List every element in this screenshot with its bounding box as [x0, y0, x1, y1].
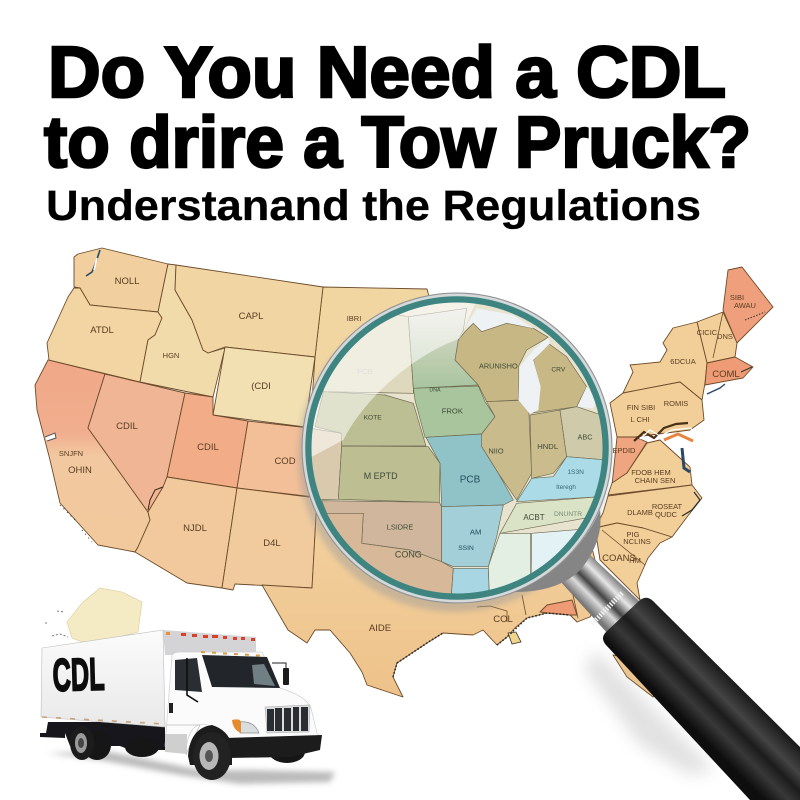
- magnified great lakes: [465, 308, 597, 414]
- state labels: [59, 276, 756, 634]
- Texas and the Gulf coast: [262, 498, 612, 697]
- state labels: COML: [712, 369, 740, 380]
- magnified Ohio: [560, 407, 607, 460]
- windshield reflection: [252, 664, 275, 686]
- Puget Sound and Pacific coast marks: [45, 250, 163, 542]
- magnified Illinois: [482, 400, 532, 500]
- magnified Indiana: [530, 410, 567, 478]
- box lower marker lights: [42, 717, 165, 724]
- Arizona: [135, 477, 237, 588]
- magnified labels: NIIO: [488, 447, 504, 456]
- Gulf state borders: [477, 595, 578, 622]
- state labels: IBRI: [347, 314, 361, 323]
- state labels: FDOB HEM: [631, 468, 671, 477]
- West Virginia: [612, 437, 647, 485]
- New Mexico: [222, 488, 317, 590]
- metal neck: [560, 553, 651, 645]
- windshield: [202, 655, 280, 688]
- grille: [265, 705, 310, 733]
- state labels: CAPL: [239, 311, 263, 322]
- magnified Missouri: [426, 434, 513, 507]
- magnified Nebraska: [315, 392, 426, 446]
- door handle: [169, 703, 173, 713]
- magnified Mississippi: [488, 533, 531, 590]
- rear wheels: [70, 726, 159, 760]
- truck: [40, 630, 335, 784]
- Idaho: [140, 264, 225, 397]
- state labels: HM: [629, 556, 641, 565]
- title: Understanand the Regulations: [46, 182, 701, 230]
- magnified labels: CRV: [551, 367, 566, 374]
- Louisiana coast islands: [508, 632, 521, 644]
- state labels: NOLL: [115, 276, 139, 287]
- neck collar: [515, 510, 601, 592]
- Virginia: [608, 440, 692, 495]
- cab roof lights: [201, 652, 267, 656]
- state labels: SNJFN: [59, 449, 83, 458]
- state labels: CDIL: [197, 442, 219, 453]
- state labels: DLAMB: [627, 508, 653, 517]
- state labels: ROSEAT: [652, 502, 683, 511]
- lens silver rim highlight: [304, 295, 610, 601]
- front wheel: [188, 725, 232, 780]
- state labels: ROMIS: [664, 399, 688, 408]
- state labels: EPDID: [613, 446, 636, 455]
- Gulf coast detail: [393, 613, 570, 677]
- lens and handle shadow: [298, 300, 715, 775]
- roof marker lights: [166, 632, 255, 641]
- Oregon: [47, 288, 162, 382]
- box side logo text: CDL: [52, 648, 105, 701]
- state labels: OHIN: [68, 465, 92, 476]
- state labels: CHAIN SEN: [635, 476, 675, 485]
- door mirror: [187, 658, 198, 702]
- lens rim: [302, 293, 612, 603]
- Alaska inset: [45, 588, 142, 645]
- Vermont and New Hampshire: [697, 312, 737, 363]
- magnified labels: DNUNTR: [554, 511, 582, 518]
- side window: [175, 658, 202, 692]
- neck knurled band: [592, 593, 622, 624]
- Pennsylvania: [610, 382, 704, 437]
- magnified labels: PCB: [357, 367, 373, 376]
- magnified map: [312, 302, 602, 594]
- state labels: HGN: [163, 351, 179, 360]
- magnified labels: AM: [470, 527, 481, 536]
- cargo box roof panel: [163, 630, 256, 655]
- magnified labels: ABC: [577, 432, 593, 441]
- state labels: AWAU: [734, 301, 756, 310]
- magnified labels: CONG: [395, 550, 422, 560]
- magnified labels: ARUNISHO: [479, 361, 518, 370]
- Montana: [175, 265, 323, 357]
- Chesapeake coast colours: [634, 312, 765, 516]
- magnified Oklahoma: [322, 501, 442, 562]
- state labels: DNS: [717, 332, 733, 341]
- magnified labels: SSIN: [458, 545, 474, 552]
- California: [35, 360, 150, 552]
- New York: [623, 322, 707, 400]
- magnified labels: [357, 361, 593, 560]
- South Carolina and Georgia: [595, 523, 672, 600]
- state labels: (CDI: [251, 381, 271, 392]
- magnified Texas: [327, 513, 454, 594]
- lens glare: [312, 302, 475, 457]
- state labels: COD: [274, 456, 296, 467]
- magnified Dakotas: [323, 314, 414, 394]
- Vermont border: [713, 312, 723, 358]
- magnified labels: FROK: [442, 407, 464, 416]
- Utah: [167, 393, 248, 488]
- state labels: L CHI: [631, 415, 649, 424]
- Wyoming: [213, 347, 315, 427]
- Washington: [74, 248, 168, 312]
- cab step: [165, 734, 187, 754]
- state labels: QUDC: [655, 510, 678, 519]
- magnified labels: M EPTD: [364, 471, 398, 481]
- black grip: [603, 598, 800, 800]
- Colorado: [237, 421, 345, 500]
- magnified labels: KOTE: [364, 415, 382, 422]
- state labels: AIDE: [369, 623, 391, 634]
- magnified labels: ACBT: [523, 513, 545, 522]
- Massachusetts: [705, 357, 753, 385]
- magnified Arkansas: [442, 505, 503, 567]
- title: [44, 33, 751, 230]
- magnified Wisconsin and upper peninsula: [455, 323, 548, 402]
- magnified Tennessee: [500, 497, 600, 533]
- mirror: [272, 663, 289, 685]
- state labels: CDIL: [116, 421, 138, 432]
- North Carolina: [595, 485, 702, 537]
- state labels: CICIC: [697, 328, 718, 337]
- state labels: PIG: [627, 530, 640, 539]
- Florida tip: [613, 655, 660, 697]
- magnified labels: HNDL: [537, 442, 558, 451]
- title: Do You Need a CDL: [48, 33, 726, 113]
- headlight: [232, 719, 259, 733]
- Carolina border: [602, 530, 645, 565]
- lens teal ring: [308, 299, 606, 597]
- Florida panhandle: [540, 600, 577, 615]
- magnified Kentucky: [517, 457, 607, 502]
- chassis: [40, 722, 165, 750]
- magnified labels: Iteregh: [556, 484, 576, 491]
- magnified Alabama: [531, 529, 578, 574]
- magnified labels: DNA: [429, 387, 441, 393]
- state labels: FIN SIBI: [627, 403, 655, 412]
- cab body: [165, 652, 322, 750]
- magnifying glass: [293, 280, 800, 800]
- Maine: [723, 267, 773, 343]
- state labels: NJDL: [183, 523, 207, 534]
- magnified labels: 1S3N: [567, 469, 584, 476]
- title: to drire a Tow Pruck?: [44, 103, 751, 183]
- map of the United States: [35, 248, 773, 697]
- bumper: [225, 735, 322, 758]
- magnified Michigan: [530, 343, 587, 413]
- far front wheel: [269, 741, 305, 763]
- state labels: 6DCUA: [670, 357, 696, 366]
- magnified Louisiana: [451, 568, 489, 594]
- state labels: COL: [493, 614, 513, 625]
- state labels: NCLINS: [623, 537, 651, 546]
- magnified Iowa: [413, 386, 495, 437]
- state labels: D4L: [263, 538, 281, 549]
- magnified eastern Colorado: [312, 428, 342, 500]
- state labels: COANS: [602, 553, 636, 564]
- Alaska islands: [45, 611, 68, 637]
- state labels: ATDL: [90, 325, 114, 336]
- northern plains behind the lens: [310, 287, 430, 430]
- magnified Kansas: [338, 446, 440, 502]
- magnified labels: LSIDRE: [387, 522, 413, 531]
- magnified labels: PCB: [460, 474, 481, 485]
- ground shadow: [47, 752, 335, 784]
- magnified Minnesota: [408, 308, 478, 388]
- door shadow: [166, 725, 200, 755]
- Nevada: [88, 374, 185, 512]
- cargo box: [41, 630, 165, 727]
- state labels: SIBI: [730, 293, 744, 302]
